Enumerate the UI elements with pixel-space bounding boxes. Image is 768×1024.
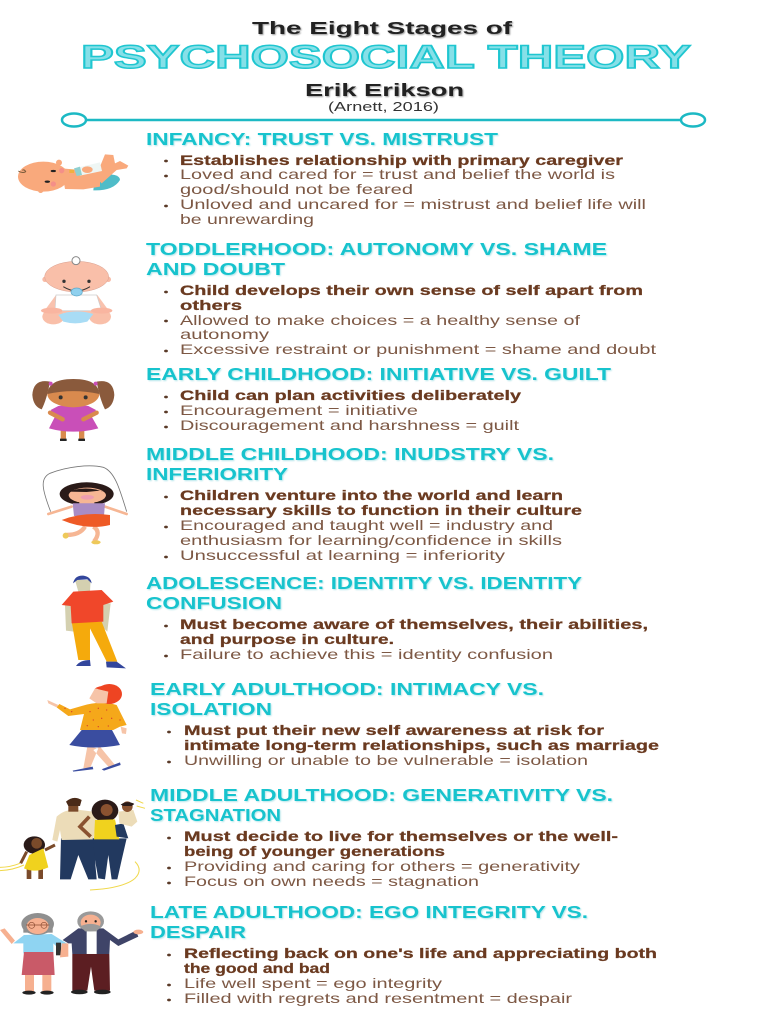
bullet list: necessary skills to function in their culture	[180, 502, 582, 518]
icon: teenager in red shirt	[62, 576, 126, 668]
bullet list: Excessive restraint or punishment = shame and doubt	[180, 341, 656, 357]
bullet list: Allowed to make choices = a healthy sense of	[180, 312, 580, 328]
icon: family of four	[0, 798, 145, 890]
bullet list: Discouragement and harshness = guilt	[180, 417, 519, 433]
bullet list	[164, 282, 656, 357]
bullet list: Failure to achieve this = identity confusion	[180, 646, 553, 662]
panel: toddlerhood	[41, 239, 656, 357]
heading	[146, 573, 582, 613]
bullet list	[164, 387, 521, 433]
bullet list: being of younger generations	[184, 843, 445, 859]
bullet list	[167, 945, 657, 1006]
bullet list: Must decide to live for themselves or the well-	[184, 828, 618, 844]
panel: early childhood	[32, 364, 611, 441]
heading: TODDLERHOOD: AUTONOMY VS. SHAME	[146, 239, 607, 259]
bullet list: Life well spent = ego integrity	[184, 975, 442, 991]
bullet list: Child develops their own sense of self apart from	[180, 282, 643, 298]
bullet list	[167, 722, 659, 768]
heading: ISOLATION	[150, 699, 272, 719]
bullet list: Child can plan activities deliberately	[180, 387, 521, 403]
bullet list: be unrewarding	[180, 211, 314, 227]
heading: MIDDLE CHILDHOOD: INUDSTRY VS.	[146, 444, 554, 464]
bullet list	[164, 487, 582, 563]
bullet list: Providing and caring for others = generativity	[184, 858, 580, 874]
bullet list: Filled with regrets and resentment = despair	[184, 990, 572, 1006]
bullet list: Loved and cared for = trust and belief the world is	[180, 166, 615, 182]
panel: adolescence	[62, 573, 648, 668]
heading: INFANCY: TRUST VS. MISTRUST	[146, 129, 498, 149]
title: psychosocial theory: PSYCHOSOCIAL THEORY	[81, 39, 691, 75]
bullet list: Encouragement = initiative	[180, 402, 418, 418]
bullet list	[164, 152, 646, 227]
heading: EARLY CHILDHOOD: INITIATIVE VS. GUILT	[146, 364, 611, 384]
panel: middle adulthood	[0, 785, 618, 890]
icon: woman waving	[47, 684, 127, 772]
bullet list: Establishes relationship with primary caregiver	[180, 152, 624, 168]
panel: late adulthood	[0, 902, 657, 1006]
bullet list: Unloved and uncared for = mistrust and belief life will	[180, 196, 646, 212]
bullet list: and purpose in culture.	[180, 631, 394, 647]
bullet list: intimate long-term relationships, such as marriage	[184, 737, 659, 753]
girl figure	[21, 836, 55, 879]
bullet list: Reflecting back on one's life and appreciating both	[184, 945, 657, 961]
title: the eight stages of: The Eight Stages of	[252, 18, 512, 38]
icon: elderly couple	[0, 911, 143, 995]
citation: (Arnett, 2016)	[328, 99, 439, 114]
heading: AND DOUBT	[146, 259, 285, 279]
heading	[150, 902, 588, 942]
bullet list: Children venture into the world and learn	[180, 487, 563, 503]
heading	[146, 444, 554, 484]
heading: ADOLESCENCE: IDENTITY VS. IDENTITY	[146, 573, 582, 593]
bullet list: good/should not be feared	[180, 181, 413, 197]
bullet list	[164, 616, 648, 662]
bullet list: Focus on own needs = stagnation	[184, 873, 479, 889]
heading	[146, 239, 607, 279]
heading: STAGNATION	[150, 805, 281, 825]
panel: early adulthood	[47, 679, 659, 772]
heading: EARLY ADULTHOOD: INTIMACY VS.	[150, 679, 544, 699]
panel: infancy	[18, 129, 646, 227]
heading: MIDDLE ADULTHOOD: GENERATIVITY VS.	[150, 785, 613, 805]
header	[62, 18, 705, 126]
heading: CONFUSION	[146, 593, 282, 613]
bullet list: Must become aware of themselves, their abilities,	[180, 616, 648, 632]
divider with end circles	[62, 114, 705, 126]
heading: DESPAIR	[150, 922, 246, 942]
panel: middle childhood	[43, 444, 582, 563]
heading: LATE ADULTHOOD: EGO INTEGRITY VS.	[150, 902, 588, 922]
bullet list	[167, 828, 618, 889]
heading: INFERIORITY	[146, 464, 288, 484]
icon: baby with bottle	[18, 154, 128, 193]
bullet list: the good and bad	[184, 960, 330, 976]
bullet list: others	[180, 297, 242, 313]
bullet list: Unwilling or unable to be vulnerable = isolation	[184, 752, 588, 768]
bullet list: Must put their new self awareness at risk for	[184, 722, 605, 738]
icon: baby with pacifier	[41, 257, 112, 324]
heading	[150, 785, 613, 825]
bullet list: enthusiasm for learning/confidence in skills	[180, 532, 562, 548]
bullet list: Unsuccessful at learning = inferiority	[180, 547, 505, 563]
heading	[150, 679, 544, 719]
bullet list: Encouraged and taught well = industry and	[180, 517, 553, 533]
bullet list: autonomy	[180, 326, 269, 342]
icon: girl in pink dress	[32, 379, 114, 441]
icon: girl with jump rope	[43, 466, 127, 544]
subtitle: erik erikson: Erik Erikson	[305, 80, 464, 100]
